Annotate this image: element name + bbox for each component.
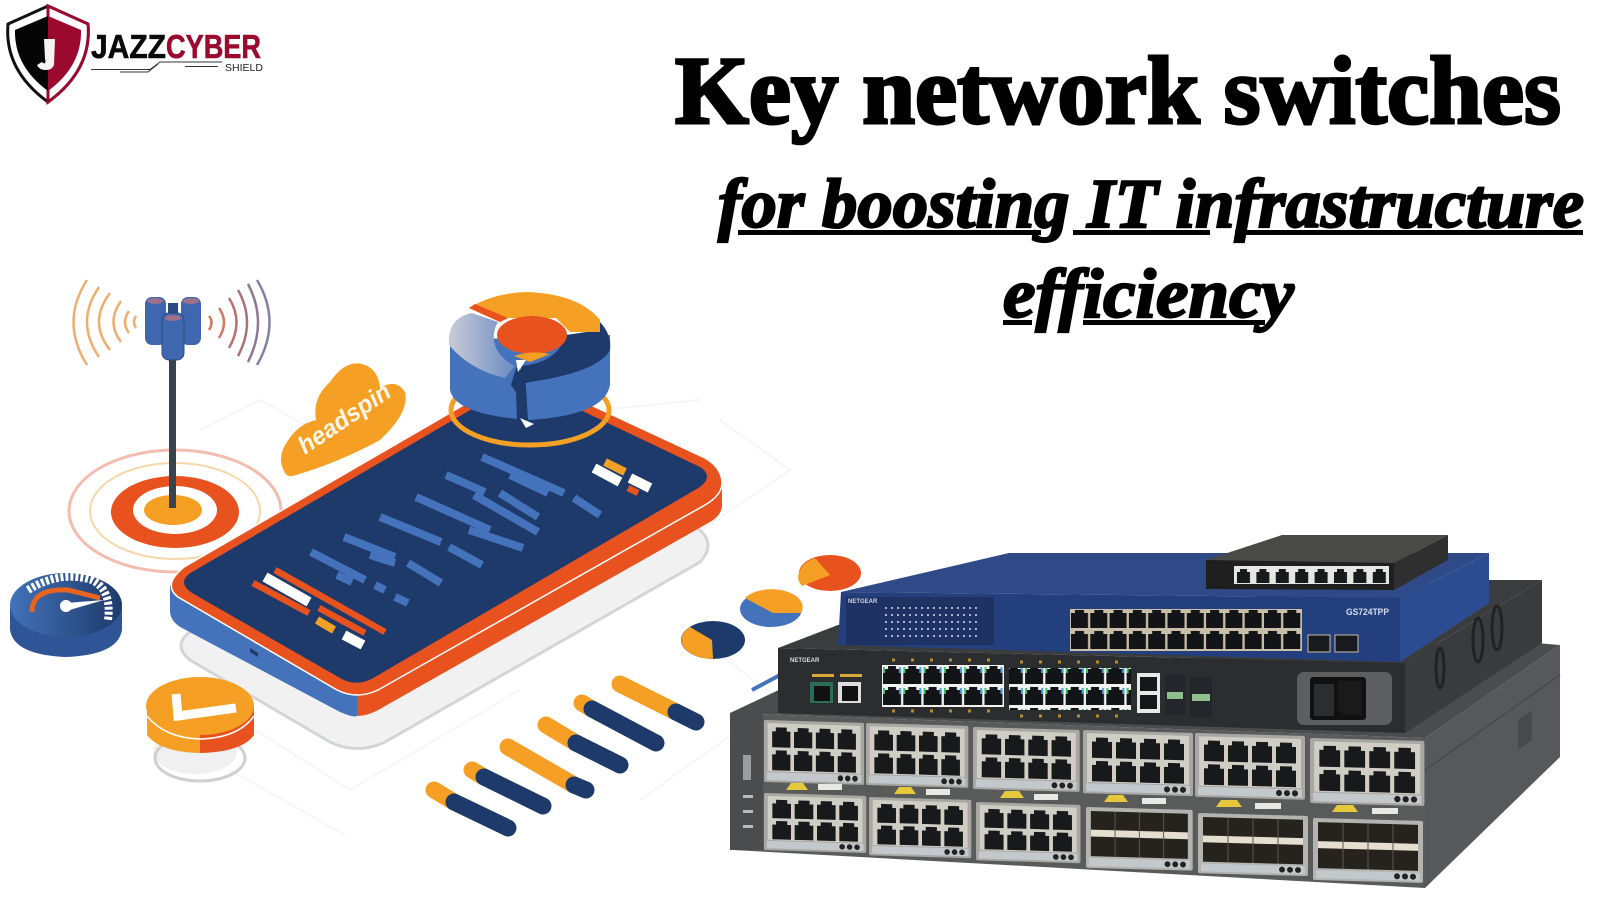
chassis front bbox=[730, 713, 1425, 888]
antenna heads bbox=[145, 297, 201, 360]
small blue tick bbox=[752, 675, 780, 690]
pie blue bbox=[740, 589, 803, 627]
side bbox=[1400, 553, 1489, 662]
target rings bbox=[69, 450, 281, 572]
phone side bbox=[170, 585, 357, 716]
lcd panel: NETGEAR bbox=[848, 599, 878, 605]
port single bbox=[1137, 673, 1160, 713]
status leds bbox=[892, 660, 1130, 716]
circuit line bbox=[91, 62, 222, 72]
shadow ring bbox=[153, 730, 237, 774]
check button bbox=[146, 677, 254, 781]
icon: shield bbox=[8, 6, 88, 102]
screen bars bbox=[253, 457, 650, 645]
donut body bbox=[450, 335, 610, 420]
ethernet ports bbox=[1070, 609, 1302, 651]
model label: GS724TPP bbox=[1346, 607, 1389, 617]
donut chart bbox=[449, 292, 610, 445]
background grid bbox=[200, 400, 790, 835]
front bbox=[778, 648, 1405, 733]
base ring bbox=[451, 375, 609, 445]
phone top bbox=[171, 376, 722, 695]
front bbox=[1206, 560, 1394, 590]
side bbox=[1405, 580, 1542, 733]
subtitle line 2: efficiency bbox=[1003, 256, 1295, 333]
phone bbox=[170, 376, 722, 716]
left control strip bbox=[730, 713, 763, 850]
top bbox=[841, 553, 1489, 598]
module tags bbox=[786, 783, 1398, 814]
logo tagline: SHIELD bbox=[225, 63, 263, 74]
signal waves right bbox=[209, 280, 270, 365]
title: Key network switches bbox=[675, 37, 1561, 144]
port block 1 bbox=[882, 665, 1004, 707]
port block 2 bbox=[1009, 668, 1131, 710]
top bbox=[778, 580, 1542, 663]
gauge arc bbox=[32, 590, 100, 612]
middle switch bbox=[778, 580, 1542, 733]
large switch bbox=[730, 640, 1560, 888]
logo bbox=[8, 6, 263, 102]
blue switch bbox=[838, 553, 1489, 662]
fans bbox=[1436, 606, 1502, 688]
check mark bbox=[176, 694, 236, 716]
brand label: NETGEAR bbox=[790, 658, 820, 664]
side bbox=[1394, 535, 1448, 590]
modules bottom row bbox=[764, 793, 1423, 883]
logo wordmark accent: CYBER bbox=[166, 28, 261, 65]
lcd panel bbox=[846, 597, 994, 645]
ports bbox=[1234, 566, 1389, 584]
subtitle line 1: for boosting IT infrastructure bbox=[718, 166, 1584, 243]
antenna bbox=[74, 280, 270, 508]
sfp cages bbox=[1165, 675, 1212, 717]
orange centre bbox=[497, 316, 567, 354]
cloud bbox=[281, 363, 406, 476]
cylinder bbox=[147, 706, 200, 753]
gauge bbox=[10, 573, 122, 657]
small switch bbox=[1206, 535, 1448, 590]
gray segment bbox=[449, 313, 515, 378]
mgmt ports bbox=[810, 674, 862, 703]
navy top bbox=[516, 322, 610, 386]
power inlet bbox=[1297, 672, 1392, 725]
pie navy bbox=[681, 621, 745, 659]
pole bbox=[169, 350, 176, 508]
phone tray bbox=[181, 440, 708, 748]
modules top row bbox=[764, 720, 1424, 806]
signal waves left bbox=[74, 280, 136, 365]
top bbox=[1206, 535, 1448, 563]
yellow segment bbox=[469, 292, 600, 332]
chassis top bbox=[730, 640, 1560, 738]
pie red bbox=[798, 555, 861, 591]
logo wordmark: JAZZ bbox=[91, 28, 166, 65]
gauge ticks bbox=[28, 577, 109, 620]
needle bbox=[66, 600, 104, 611]
front bbox=[838, 592, 1400, 662]
charging port bbox=[250, 648, 258, 657]
chassis side bbox=[1425, 645, 1560, 888]
cloud label: headspin bbox=[293, 377, 396, 460]
pie charts bbox=[681, 555, 861, 659]
crack bbox=[511, 368, 528, 420]
phone side right bbox=[357, 480, 722, 716]
bar chart bbox=[434, 684, 696, 828]
phone screen bbox=[184, 384, 707, 683]
sfp ports bbox=[1308, 635, 1358, 652]
